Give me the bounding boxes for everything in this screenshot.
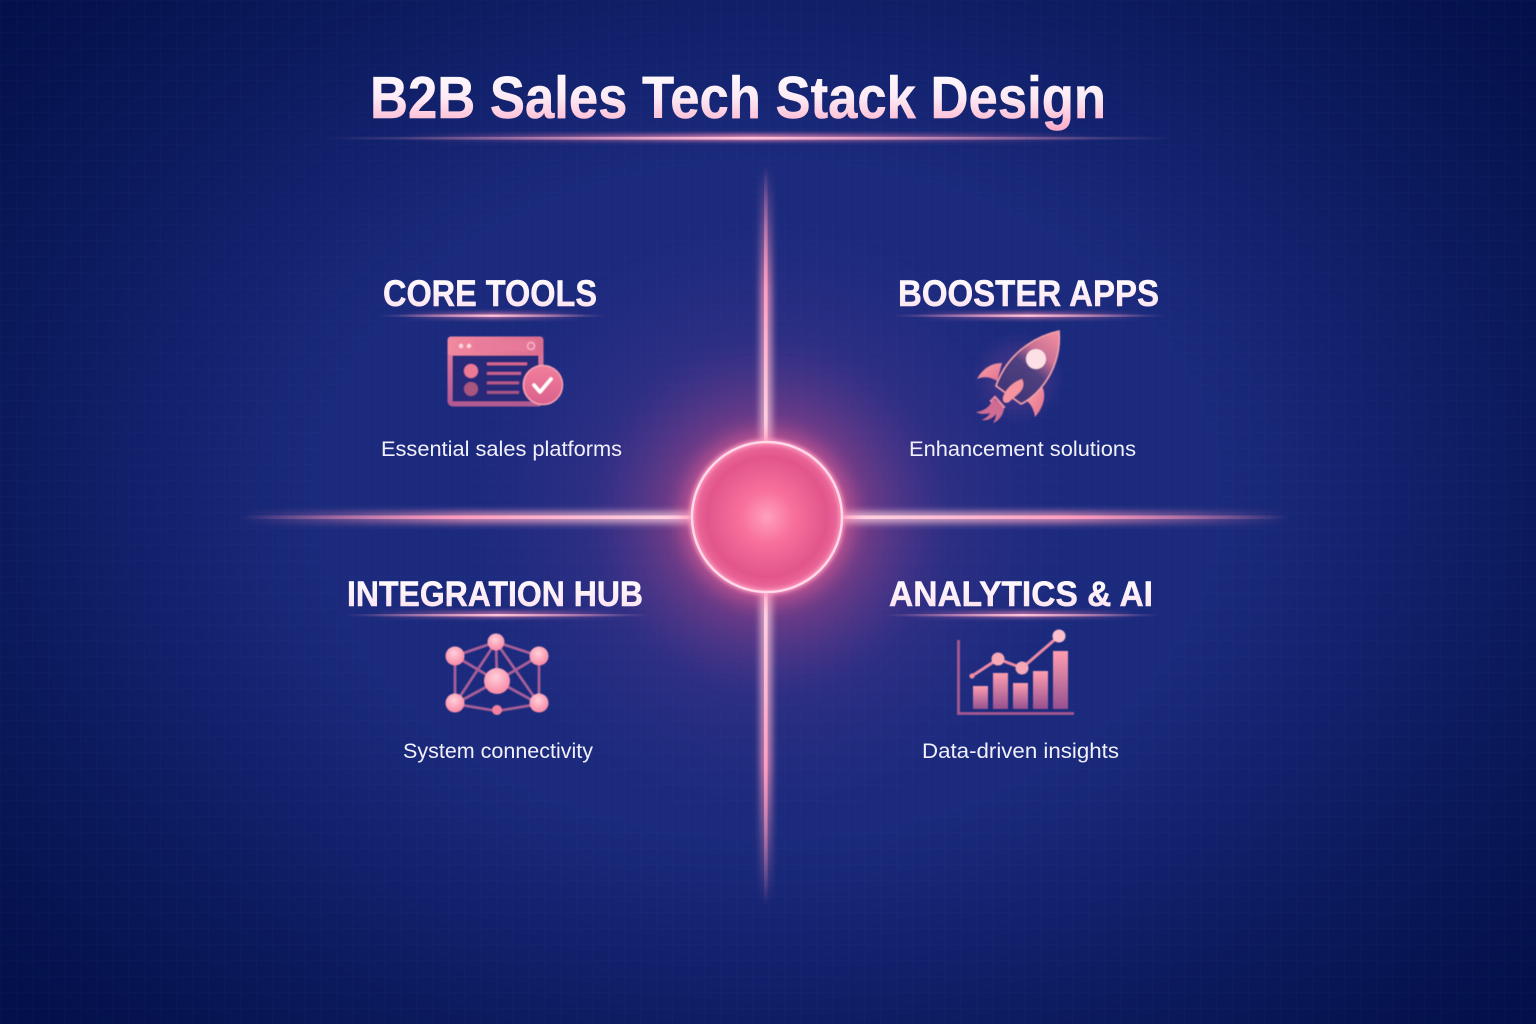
center fin (1003, 379, 1023, 403)
description: integration hub: System connectivity (403, 739, 593, 763)
icon: connected network nodes (446, 634, 548, 715)
heading: core tools: CORE TOOLS (383, 273, 597, 314)
description: core tools: Essential sales platforms (381, 437, 622, 461)
nozzle (991, 397, 1004, 410)
underline: analytics and ai (885, 612, 1160, 618)
panel: core tools (380, 273, 622, 461)
icon: browser window with check badge (448, 336, 562, 404)
title: B2B Sales Tech Stack Design (370, 65, 1106, 131)
panel: analytics and ai (885, 574, 1160, 763)
heading: analytics and ai: ANALYTICS & AI (889, 574, 1153, 614)
panel: integration hub (345, 574, 650, 763)
description: analytics and ai: Data-driven insights (922, 739, 1119, 763)
panel: booster apps (893, 273, 1165, 461)
underline: core tools (380, 312, 605, 318)
heading: integration hub: INTEGRATION HUB (347, 574, 643, 614)
underline: integration hub (345, 612, 650, 618)
right fin (1027, 386, 1044, 417)
icon: rocket (976, 331, 1059, 423)
title underline glow (325, 134, 1175, 141)
heading: booster apps: BOOSTER APPS (898, 273, 1159, 314)
icon: bar and line chart (958, 630, 1074, 714)
flames (976, 398, 1004, 423)
central glowing orb (683, 433, 851, 601)
underline: booster apps (893, 312, 1165, 318)
cross connector lines (240, 166, 1290, 905)
left fin (977, 363, 1002, 381)
description: booster apps: Enhancement solutions (909, 437, 1136, 461)
hull (996, 331, 1059, 404)
